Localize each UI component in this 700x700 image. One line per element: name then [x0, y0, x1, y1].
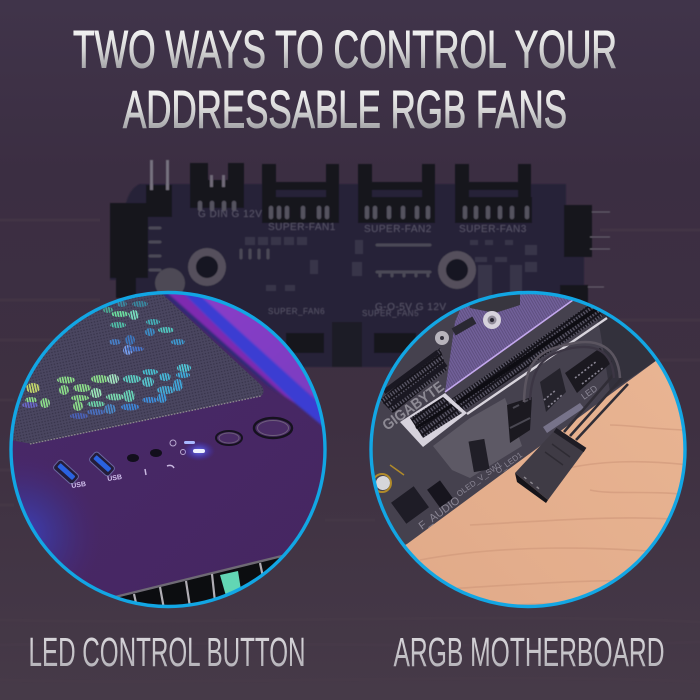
top pin header: [110, 160, 592, 367]
PCB labels: SUPER_FAN5: [362, 309, 419, 318]
motherboard: [372, 301, 656, 545]
board silkscreen text: LED: [579, 383, 600, 402]
top edge light band: [164, 294, 322, 427]
PCB labels: [198, 209, 527, 318]
board silkscreen text: OLED_V_SW1: [455, 460, 504, 499]
PCB labels: SUPER-FAN3: [459, 224, 527, 235]
board components: [373, 311, 612, 524]
bottom vent grille: [116, 555, 282, 605]
PCB labels: G DIN G 12V: [198, 209, 262, 220]
mesh top panel with fan glow: [10, 290, 264, 444]
wood surface: [405, 361, 684, 605]
board silkscreen text: O_LED1: [494, 450, 524, 476]
caption: LED control button: LED CONTROL BUTTON: [28, 629, 306, 675]
PCB hub board: [110, 160, 610, 367]
title: [73, 20, 617, 140]
photo circle: ARGB motherboard header: [365, 285, 695, 615]
board silkscreen text: F_AUDIO: [417, 494, 463, 532]
photo circle: LED control button on PC case: [9, 290, 327, 608]
front panel ports and buttons: USB: [107, 474, 123, 483]
ARGB cable and connector: [515, 342, 628, 503]
front panel ports and buttons: [52, 418, 292, 490]
PCB labels: G-O-5V G 12V: [375, 302, 447, 313]
mounting holes: [155, 248, 476, 298]
front panel ports and buttons: USB: [71, 481, 87, 490]
PCB labels: SUPER-FAN1: [268, 222, 336, 233]
PCIe slots: [380, 300, 607, 478]
PCB labels: SUPER_FAN6: [268, 307, 325, 316]
PCB labels: SUPER-FAN2: [364, 224, 432, 235]
board silkscreen text: [379, 378, 600, 532]
board silkscreen text: GIGABYTE: [379, 378, 448, 434]
